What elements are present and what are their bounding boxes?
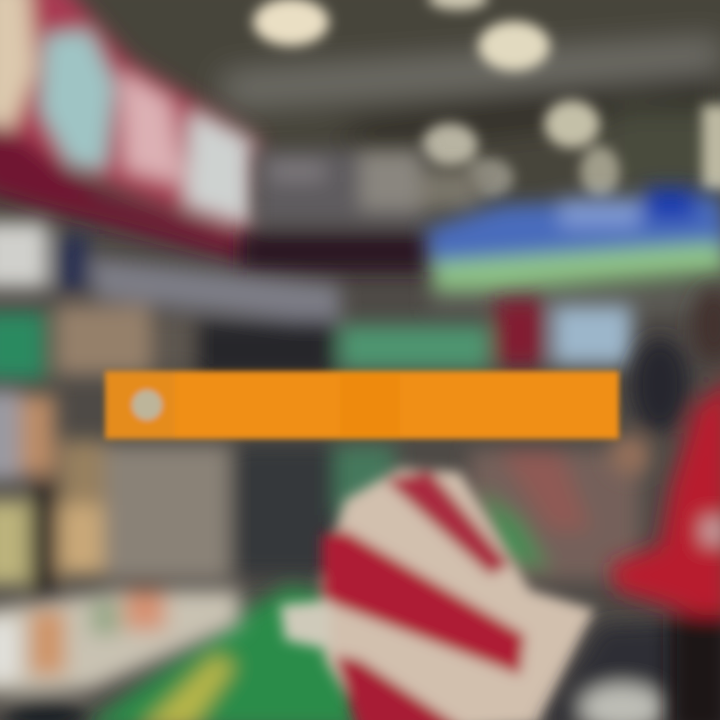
- dark foreground right: [540, 620, 720, 720]
- ceiling: [0, 0, 720, 220]
- person in red: [610, 287, 720, 720]
- banner icon: [132, 390, 162, 420]
- middle row of stalls: [0, 222, 632, 380]
- ceiling lights: [253, 0, 720, 198]
- lower left stall shelves: [0, 390, 640, 600]
- green floor: [80, 585, 360, 720]
- striped red and white ball: [280, 468, 595, 720]
- orange banner: [105, 371, 619, 439]
- right side blue and green banner: [425, 188, 720, 310]
- centre back wall signage: [240, 150, 480, 272]
- tent canopy: red white and blue: [0, 0, 260, 262]
- left display table: [0, 590, 240, 720]
